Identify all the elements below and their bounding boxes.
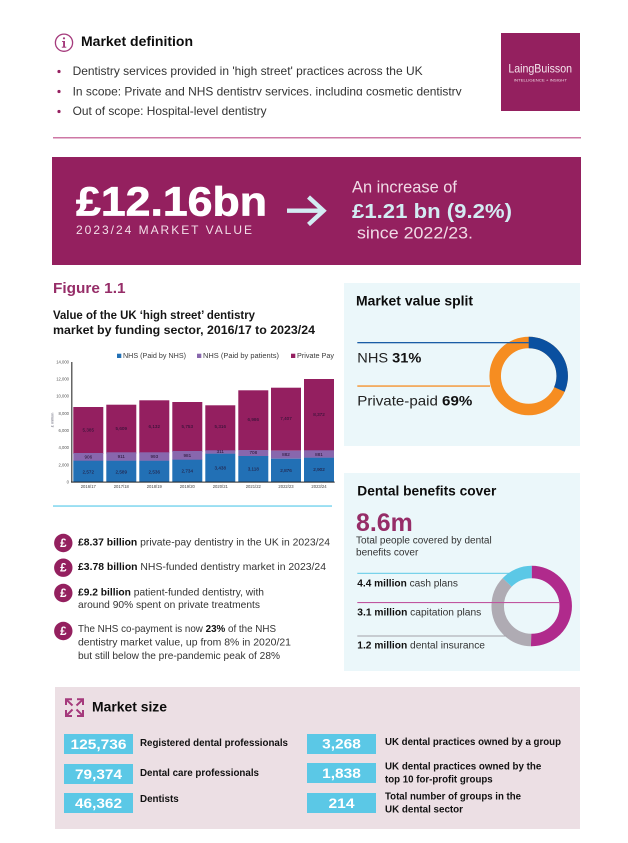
data labels: 311 [217,449,224,454]
data labels: 8,372 [313,412,325,417]
legend [117,353,335,360]
data labels: 2,876 [280,468,292,473]
panel: market size [55,687,580,829]
data labels [83,412,325,474]
stat: total groups [307,792,522,816]
logo: LaingBuisson: INTELLIGENCE + INSIGHT [514,79,568,83]
chart subtitle [53,310,316,337]
banner: market value [52,157,581,265]
panel: dental benefits cover [344,473,580,671]
bars [73,379,334,482]
fact: private pay: £8.37 billion private-pay dentistry in the UK in 2023/24 [78,537,330,549]
x axis: 2018/19 [147,484,163,489]
stat: registered dental professionals: Registered dental professionals [140,738,289,749]
fact: patient funded: around 90% spent on private treatments [78,599,260,611]
icon: information [55,34,73,51]
headline figure: 8.6m [356,509,413,537]
heading: figure 1.1: Figure 1.1 [53,281,126,297]
label: private-paid: Private-paid 69% [357,393,473,409]
fact: NHS co-payment: but still below the pre-pandemic peak of 28% [78,650,280,662]
headline value: £12.16bn [76,179,267,225]
y axis: 12,000 [56,377,70,382]
data labels: 7,407 [280,416,292,421]
x axis: 2020/21 [213,484,229,489]
chart subtitle: Value of the UK ‘high street’ dentistry [53,310,256,322]
legend: Private Pay [297,353,335,360]
fact: private pay [54,534,330,552]
stat: total groups: 214 [328,795,355,811]
label: cash plans: 4.4 million cash plans [357,579,458,590]
donut chart [495,342,562,410]
x axis [71,482,335,489]
data labels: 6,132 [149,424,160,429]
stat: practices owned by top 10 groups: UK dental practices owned by the [385,762,542,773]
data labels: 2,572 [83,470,94,474]
value caption: 2023/24 MARKET VALUE [76,223,252,237]
stat: dental care professionals [64,764,260,784]
data labels: 881 [315,452,323,457]
bullet list: In scope: Private and NHS dentistry services, including cosmetic dentistry [73,84,462,98]
stat: practices owned by a group [307,734,561,754]
y axis: 4,000 [59,445,70,450]
stat: total groups: Total number of groups in the [385,792,522,803]
stat: dentists: Dentists [140,794,179,805]
arrow [287,197,324,224]
panel: market value split [344,283,580,446]
fact: NHS co-payment [54,622,291,662]
fact: NHS funded: £ [60,563,67,575]
stat: dentists: 46,362 [75,795,122,811]
fact: NHS funded [54,558,326,577]
fact: private pay: £ [60,538,67,550]
data labels: 5,316 [215,424,226,429]
bullet list: Out of scope: Hospital-level dentistry [73,104,267,118]
fact: NHS co-payment: £ [60,626,67,638]
data labels: 3,438 [215,466,226,470]
fact: NHS co-payment: The NHS co-payment is now 23% of the NHS [78,623,276,635]
chart subtitle: market by funding sector, 2016/17 to 2023/24 [53,325,316,337]
increase statement: since 2022/23. [357,224,473,243]
data labels: 5,753 [182,424,193,429]
increase statement: An increase of [352,178,457,197]
stat: practices owned by top 10 groups: top 10 for-profit groups [385,775,493,786]
fact: patient funded: £ [60,588,67,600]
logo: LaingBuisson [501,33,580,111]
data labels: 882 [282,452,290,457]
legend: NHS (Paid by NHS) [123,353,186,360]
y axis [50,360,72,484]
stat: total groups: UK dental sector [385,805,463,816]
data labels: 2,902 [313,467,325,472]
stat: dentists [64,793,179,813]
stat: registered dental professionals [64,734,289,754]
bullet list [57,64,466,118]
legend: NHS (Paid by patients) [203,353,279,360]
x axis: 2021/22 [246,484,262,489]
stat: dental care professionals: Dental care professionals [140,768,260,779]
x axis: 2023/24 [311,484,327,489]
stat: registered dental professionals: 125,736 [70,736,127,752]
x axis: 2016/17 [81,484,97,489]
heading: Market value split [356,294,474,309]
fact: NHS funded: £3.78 billion NHS-funded dentistry market in 2023/24 [78,561,326,573]
heading: Market size [92,699,167,715]
y axis: 0 [67,480,70,484]
data labels: 993 [150,454,159,459]
y axis: £ million [50,413,54,427]
label: capitation plans: 3.1 million capitation plans [357,608,481,619]
data labels: 2,536 [149,470,160,474]
data labels: 5,609 [116,426,127,431]
data labels: 6,986 [248,417,259,422]
label: NHS: NHS 31% [357,350,422,366]
stat: practices owned by top 10 groups: 1,838 [322,765,361,781]
data labels: 911 [118,454,125,459]
heading: market definition: Market definition [81,33,193,49]
stat: practices owned by top 10 groups [307,762,542,786]
stat: practices owned by a group: 3,268 [322,736,361,752]
label: private-paid [357,385,490,409]
x axis: 2022/23 [278,484,294,489]
data labels: 906 [84,454,93,460]
figure caption: benefits cover [356,548,419,559]
y axis: 14,000 [56,360,70,364]
y axis: 10,000 [56,394,70,399]
x axis: 2017/18 [114,484,130,489]
data labels: 3,118 [248,466,259,472]
stacked bar chart [50,353,335,489]
donut chart [498,572,566,640]
figure caption: Total people covered by dental [356,535,492,546]
fact: patient funded [54,584,264,611]
panel: market definition [55,33,466,118]
increase statement: £1.21 bn (9.2%) [352,201,512,223]
data labels: 2,734 [182,468,193,474]
data labels: 5,385 [83,428,94,432]
fact: patient funded: £9.2 billion patient-funded dentistry, with [78,587,264,599]
logo: LaingBuisson: LaingBuisson [508,62,572,76]
data labels: 981 [183,453,192,458]
bullet list: Dentistry services provided in 'high street' practices across the UK [73,64,423,78]
y axis: 8,000 [59,411,70,416]
heading: Dental benefits cover [357,484,497,499]
y axis: 6,000 [59,428,70,433]
fact: NHS co-payment: dentistry market value, up from 8% in 2020/21 [78,637,291,649]
data labels: 2,589 [116,470,127,474]
data labels: 708 [249,450,258,455]
y axis: 2,000 [59,462,70,467]
stat: dental care professionals: 79,374 [75,766,122,782]
key facts list [54,534,330,662]
icon: expand arrows [66,699,83,716]
label: dental insurance: 1.2 million dental insurance [357,641,485,652]
increase statement [352,178,512,243]
x axis: 2019/20 [180,484,196,489]
stat: practices owned by a group: UK dental practices owned by a group [385,737,561,748]
figure caption [356,535,492,559]
